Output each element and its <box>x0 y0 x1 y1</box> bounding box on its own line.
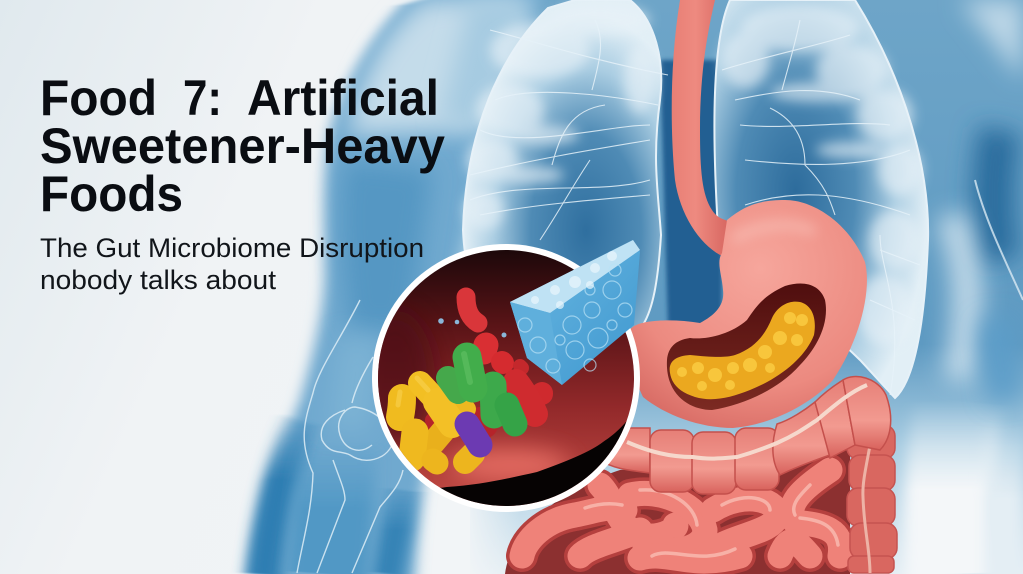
torso base <box>430 0 1023 574</box>
food mass <box>670 302 815 399</box>
stomach cavity <box>667 284 826 410</box>
title: Sweetener-Heavy <box>40 118 445 174</box>
microbiome circle <box>372 240 640 512</box>
central channel <box>660 60 722 330</box>
right side of body <box>949 0 1023 574</box>
title: Foods <box>40 166 183 222</box>
transverse colon <box>600 376 891 494</box>
title: 7: <box>183 70 222 126</box>
left arm and shoulder <box>248 0 540 574</box>
ascending colon <box>847 425 897 573</box>
right lung <box>714 0 928 398</box>
sweetener cube <box>510 240 640 385</box>
title: Artificial <box>247 70 439 126</box>
subtitle: The Gut Microbiome Disruption <box>40 233 424 263</box>
subtitle: nobody talks about <box>40 265 277 295</box>
bacteria <box>398 297 542 463</box>
left lung <box>463 0 668 350</box>
title: Food <box>40 70 157 126</box>
esophagus <box>672 0 740 256</box>
small intestines <box>505 450 850 574</box>
title <box>40 70 445 222</box>
subtitle <box>40 233 424 295</box>
stomach <box>630 200 867 428</box>
